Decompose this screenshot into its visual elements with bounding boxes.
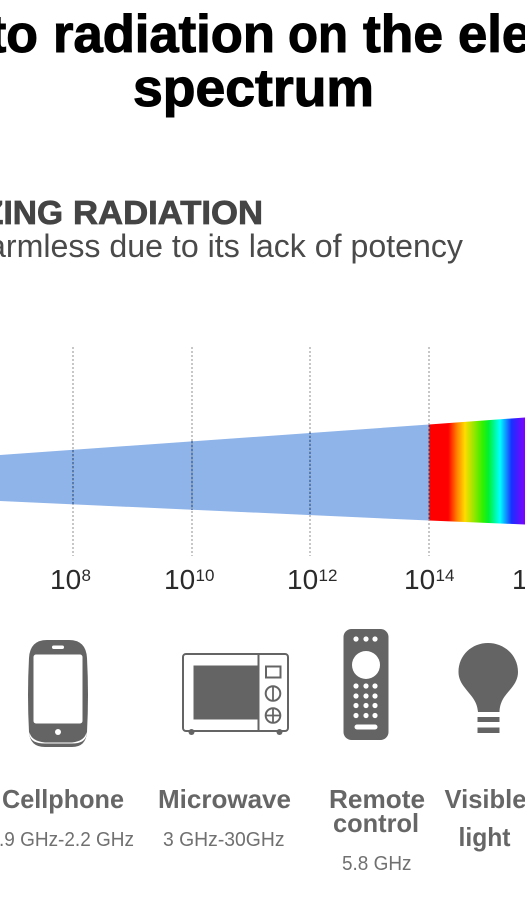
label 10^12: 10 — [287, 564, 318, 595]
frequency gridlines — [73, 347, 429, 556]
frequency: remote control: 5.8 GHz — [342, 853, 412, 875]
subheading: armless due to its lack of potency — [0, 228, 463, 264]
label: cellphone: Cellphone — [2, 784, 124, 814]
label 10^8: 8 — [82, 566, 91, 585]
axis labels — [50, 564, 525, 595]
label: visible light: light — [458, 822, 511, 852]
label: microwave: Microwave — [158, 784, 291, 814]
label: visible light — [444, 784, 525, 852]
frequency: cellphone: .9 GHz-2.2 GHz — [0, 829, 134, 851]
label: remote control — [329, 784, 425, 838]
visible light band — [429, 418, 525, 524]
title — [0, 5, 525, 118]
label: remote control: Remote — [329, 784, 425, 814]
label 10^14: 14 — [436, 566, 454, 585]
label 10^14: 10 — [404, 564, 435, 595]
icon: light bulb — [458, 643, 518, 733]
label 10^10: 10 — [196, 566, 214, 585]
label: remote control: control — [333, 808, 419, 838]
title: on — [288, 5, 348, 64]
label 10^8: 10 — [50, 564, 81, 595]
heading: non-ionizing radiation — [0, 194, 263, 231]
non-visible band — [0, 424, 429, 520]
icon: cellphone — [28, 640, 88, 747]
title: the — [363, 5, 443, 64]
spectrum wedge — [0, 418, 525, 524]
frequency: microwave: 3 GHz-30GHz — [163, 829, 284, 851]
heading: non-ionizing radiation: RADIATION — [73, 194, 263, 231]
label 10^12: 12 — [318, 566, 337, 585]
label 10^10: 10 — [164, 564, 195, 595]
title: spectrum — [133, 59, 374, 118]
title: radiation — [53, 5, 275, 64]
icon: microwave — [183, 654, 288, 735]
icon: remote control — [344, 629, 388, 740]
